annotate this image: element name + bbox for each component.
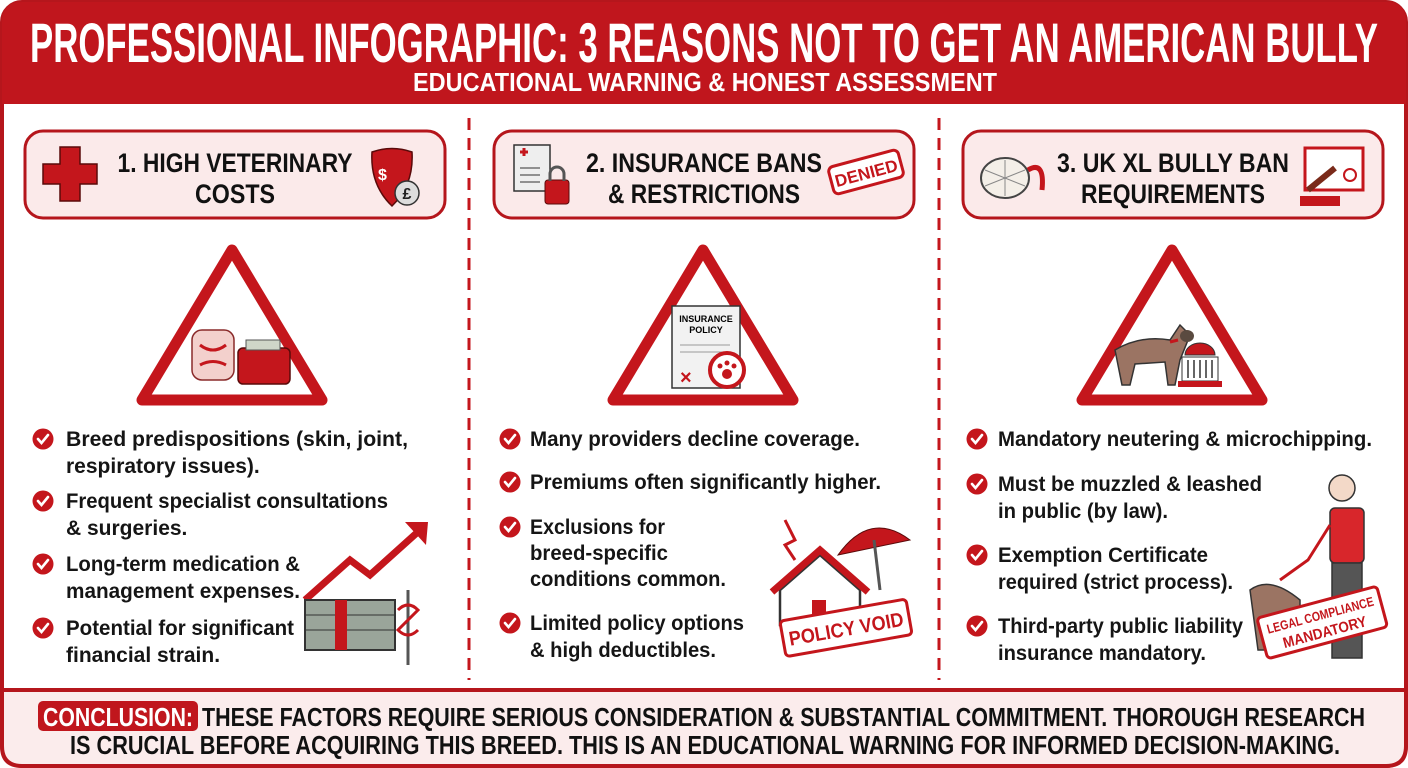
heading pill 2: DENIED — [833, 156, 900, 191]
bullets 3: Third-party public liability — [998, 615, 1243, 638]
heading pill 1: $ — [378, 167, 387, 184]
bullets 1: respiratory issues). — [66, 455, 260, 478]
icon: house with umbrella and policy void stamp: POLICY VOID — [787, 609, 905, 651]
conclusion label — [38, 701, 198, 731]
heading pill 1: COSTS — [195, 179, 275, 209]
bullets 1: & surgeries. — [66, 517, 187, 540]
heading pill 1: 1. HIGH VETERINARY — [118, 148, 352, 178]
bullets 3: required (strict process). — [998, 571, 1233, 594]
icon: person walking muzzled dog with stamp: MANDATORY — [1281, 613, 1369, 652]
subtitle: EDUCATIONAL WARNING & HONEST ASSESSMENT — [413, 67, 997, 97]
bullets 3: in public (by law). — [998, 500, 1168, 523]
icon: money and rising arrow — [305, 522, 428, 665]
icon: person walking muzzled dog with stamp: LEGAL COMPLIANCE — [1265, 594, 1376, 637]
bullets 3: Exemption Certificate — [998, 544, 1208, 567]
warning triangle 2: × — [680, 367, 692, 389]
warning triangle 2: INSURANCE — [679, 314, 733, 324]
header band — [2, 2, 1406, 104]
warning triangle 2 — [613, 250, 793, 400]
icon: house with umbrella and policy void stamp — [772, 520, 912, 657]
bullets 2: breed-specific — [530, 542, 668, 565]
bullets 2: Limited policy options — [530, 612, 744, 635]
bullets 1: management expenses. — [66, 580, 300, 603]
bullets 1: Breed predispositions (skin, joint, — [66, 428, 408, 451]
heading pill 2 — [494, 131, 914, 218]
bullets 2 — [500, 428, 881, 662]
warning triangle 2: POLICY — [689, 325, 723, 335]
bullets 1: Potential for significant — [66, 617, 294, 640]
heading pill 1 — [25, 131, 445, 218]
bullets 2: conditions common. — [530, 568, 726, 591]
heading pill 2: 2. INSURANCE BANS — [586, 148, 822, 178]
bullets 2: Exclusions for — [530, 516, 665, 539]
heading pill 1: £ — [403, 186, 412, 203]
bullets 1 — [32, 428, 408, 667]
panel: uk ban — [963, 131, 1388, 665]
heading pill 3: REQUIREMENTS — [1081, 179, 1265, 209]
panel: insurance — [494, 131, 914, 662]
heading pill 3: 3. UK XL BULLY BAN — [1057, 148, 1289, 178]
panel: vet costs — [25, 131, 445, 667]
bullets 2: & high deductibles. — [530, 639, 716, 662]
heading pill 3 — [963, 131, 1383, 218]
warning triangle 1 — [142, 250, 322, 400]
bullets 1: Long-term medication & — [66, 553, 300, 576]
bullets 3: Must be muzzled & leashed — [998, 473, 1262, 496]
warning triangle 3 — [1082, 250, 1262, 400]
conclusion band: CONCLUSION: — [43, 702, 193, 732]
bullets 1: financial strain. — [66, 644, 220, 667]
bullets 3 — [966, 428, 1372, 665]
bullets 1: Frequent specialist consultations — [66, 490, 388, 513]
bullets 3: Mandatory neutering & microchipping. — [998, 428, 1372, 451]
conclusion band — [2, 690, 1406, 766]
bullets 3: insurance mandatory. — [998, 642, 1206, 665]
bullets 2: Premiums often significantly higher. — [530, 471, 881, 494]
icon: person walking muzzled dog with stamp — [1250, 475, 1388, 659]
heading pill 2: & RESTRICTIONS — [608, 179, 800, 209]
bullets 2: Many providers decline coverage. — [530, 428, 860, 451]
